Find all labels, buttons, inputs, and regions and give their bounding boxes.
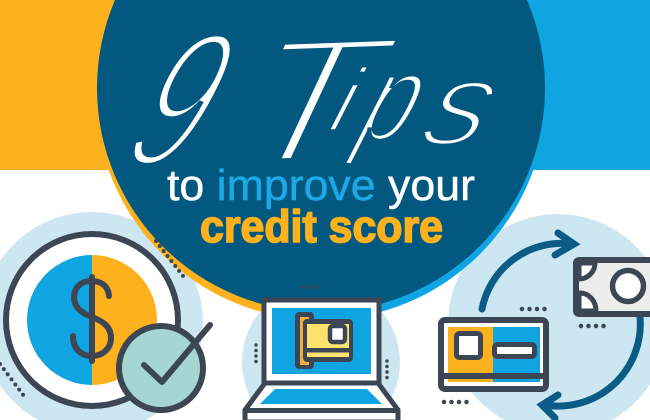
crescent: orange and blue rim behind main circle — [95, 92, 547, 320]
dots top — [301, 285, 318, 289]
light circle: exchange icon backdrop — [448, 214, 650, 420]
card front — [303, 319, 353, 362]
title: 9 Tips — [91, 0, 530, 206]
card chip — [330, 326, 345, 342]
icon: dollar coin with check — [0, 234, 210, 410]
panel: main dark circle — [97, 0, 545, 312]
card stripe — [304, 348, 352, 352]
banknote circle — [612, 270, 644, 302]
dots upper — [156, 241, 183, 276]
light circle: money icon backdrop — [0, 212, 203, 420]
panel: orange top-left band — [0, 0, 325, 170]
title: 9 Tips: p — [337, 29, 458, 166]
subtitle: to improve your: to improve your — [167, 161, 475, 210]
banknote bottom corner — [579, 293, 596, 311]
laptop base — [245, 383, 398, 420]
credit card stripe — [441, 373, 546, 379]
check badge — [119, 326, 203, 410]
credit card blue — [493, 327, 540, 382]
coin orange half — [92, 255, 157, 385]
coin ring — [6, 234, 178, 406]
dots lower — [0, 364, 24, 396]
laptop screen frame — [264, 300, 379, 383]
dots one — [522, 307, 546, 311]
title: 9 Tips: s — [399, 36, 530, 171]
card back orange — [300, 317, 309, 365]
panel: white lower background — [0, 170, 650, 420]
trackpad area — [260, 389, 382, 404]
credit card orange — [448, 327, 493, 382]
icon: laptop with card — [243, 287, 400, 420]
credit card slot — [494, 344, 534, 356]
credit card — [441, 320, 546, 389]
arrow: top arc — [482, 233, 574, 309]
base hinge bar — [243, 408, 400, 413]
dots three — [444, 400, 468, 404]
dots two — [581, 324, 605, 328]
arrow: bottom arc — [542, 317, 640, 418]
blue screen — [272, 308, 371, 374]
banknote top corner — [579, 263, 595, 279]
dots right — [385, 361, 389, 378]
coin blue half — [27, 255, 92, 385]
subtitle: credit score: credit score — [200, 201, 443, 252]
dots left — [254, 345, 258, 362]
icon: card and cash exchange — [441, 233, 650, 418]
banknote — [576, 260, 650, 314]
card yellow — [307, 324, 349, 357]
check mark — [144, 325, 210, 382]
panel: blue top-right band — [325, 0, 650, 170]
light circle: laptop icon backdrop — [242, 283, 400, 420]
credit card square — [456, 334, 480, 358]
title: 9 Tips: T — [201, 0, 426, 204]
card back — [295, 312, 314, 369]
dollar sign — [73, 277, 111, 361]
title: 9 Tips: i — [312, 50, 383, 151]
